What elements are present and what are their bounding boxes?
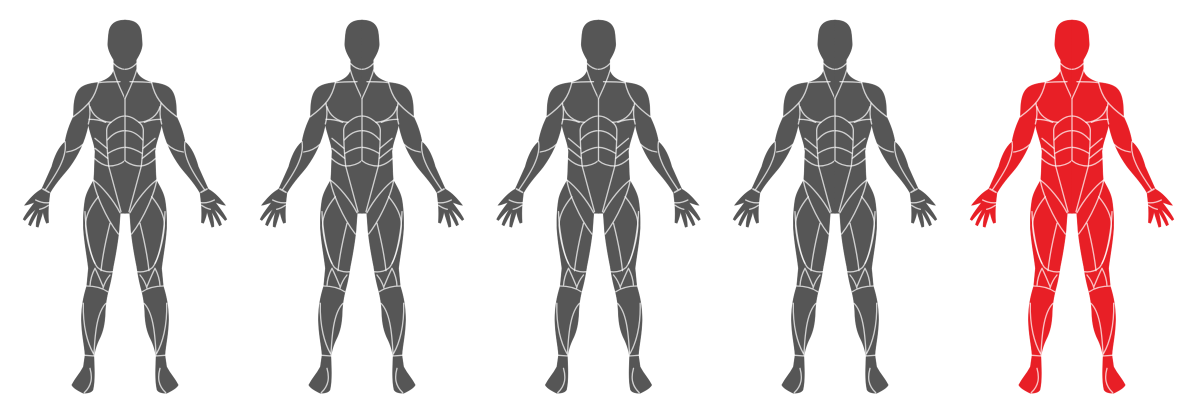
figure 5: red highlighted muscular body [970, 20, 1174, 393]
figure 1: grey muscular body [23, 20, 227, 393]
figure 2: grey muscular body [260, 20, 464, 393]
figure 3: grey muscular body [496, 20, 700, 393]
figure 4: grey muscular body [733, 20, 937, 393]
